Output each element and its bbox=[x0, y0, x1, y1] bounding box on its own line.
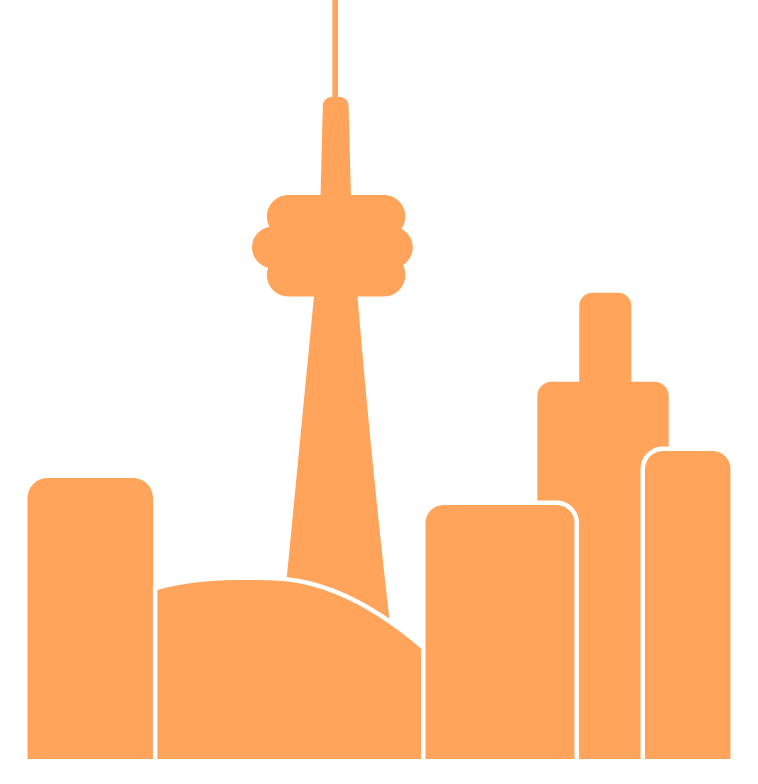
building: back tall tower bbox=[537, 293, 669, 759]
tower top section bbox=[579, 293, 631, 413]
tower lower shaft bbox=[287, 294, 390, 640]
tower antenna bbox=[332, 0, 338, 100]
tower main section bbox=[537, 382, 669, 759]
building: front centre block bbox=[426, 505, 574, 759]
tower observation pod bbox=[252, 195, 413, 296]
ground clearing below skyline bbox=[0, 759, 758, 784]
building: left block bbox=[28, 478, 153, 759]
dome: stadium bbox=[157, 580, 421, 759]
tower upper shaft bbox=[320, 97, 351, 197]
building: front right block bbox=[645, 451, 730, 759]
icon: CN Tower bbox=[252, 0, 413, 640]
